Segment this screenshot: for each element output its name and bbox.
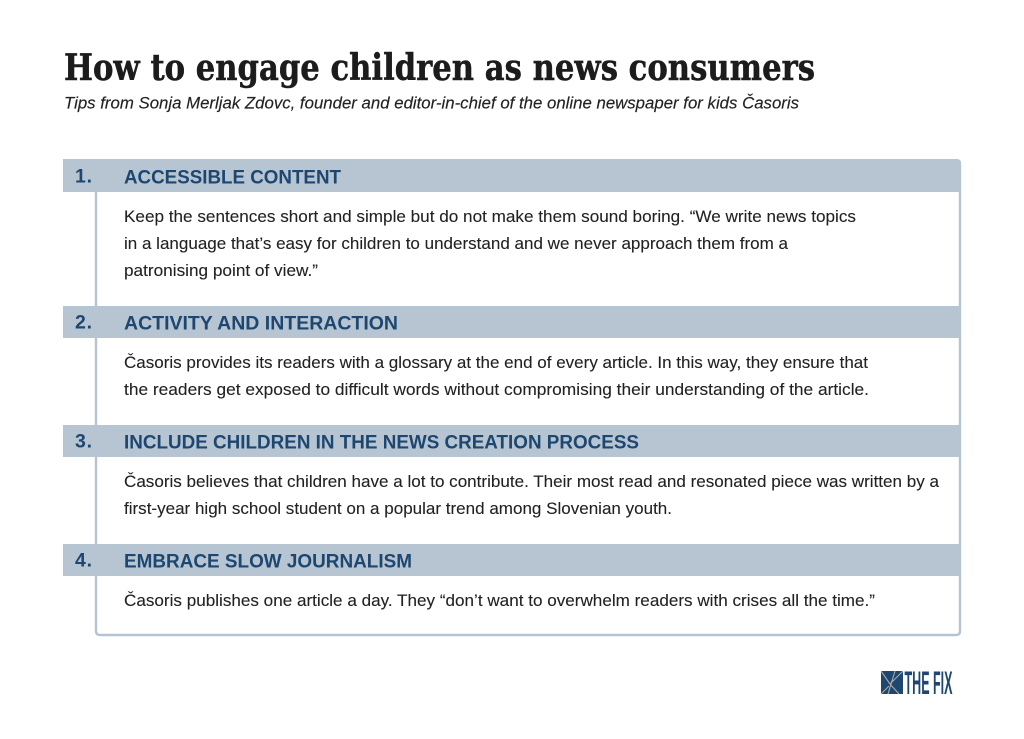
subtitle: Tips from Sonja Merljak Zdovc, founder and editor-in-chief of the online newspaper for kids Časoris: [64, 94, 799, 112]
text 3: first-year high school student on a popular trend among Slovenian youth.: [124, 500, 672, 518]
text 1: Keep the sentences short and simple but do not make them sound boring. “We write news topics: [124, 208, 856, 226]
icon: logo square: [881, 671, 903, 694]
heading 3: INCLUDE CHILDREN IN THE NEWS CREATION PROCESS: [124, 432, 639, 454]
number 3: 3.: [75, 430, 92, 452]
text 2: [124, 353, 869, 399]
heading 2: ACTIVITY AND INTERACTION: [124, 314, 398, 334]
logo: The Fix: [881, 665, 953, 701]
panel: tip 1: [63, 159, 961, 280]
text 2: the readers get exposed to difficult words without compromising their understanding of the article.: [124, 381, 869, 399]
number 2: 2.: [75, 312, 92, 334]
text 1: patronising point of view.”: [124, 262, 318, 280]
text 2: Časoris provides its readers with a glossary at the end of every article. In this way, they ensure that: [124, 353, 868, 372]
number 4: 4.: [75, 550, 92, 572]
heading 4: EMBRACE SLOW JOURNALISM: [124, 552, 412, 572]
panel: tip 2: [63, 306, 961, 399]
heading 1: ACCESSIBLE CONTENT: [124, 168, 341, 188]
text 3: [124, 472, 940, 518]
panel: tip 3: [63, 425, 961, 518]
header bar 3: [63, 425, 961, 457]
text 1: in a language that’s easy for children to understand and we never approach them from a: [124, 235, 789, 253]
text: THE FIX: [904, 665, 953, 701]
text 4: Časoris publishes one article a day. They “don’t want to overwhelm readers with crises all the time.”: [124, 591, 875, 610]
number 1: 1.: [75, 166, 92, 188]
panel: tips outline: [96, 164, 960, 635]
header bar 1: [63, 159, 961, 192]
text 3: Časoris believes that children have a lot to contribute. Their most read and resonated piece was written by a: [124, 472, 940, 491]
panel: tip 4: [63, 544, 961, 610]
header bar 2: [63, 306, 961, 338]
title: How to engage children as news consumers: [64, 47, 815, 89]
text 1: [124, 208, 856, 280]
header bar 4: [63, 544, 961, 576]
